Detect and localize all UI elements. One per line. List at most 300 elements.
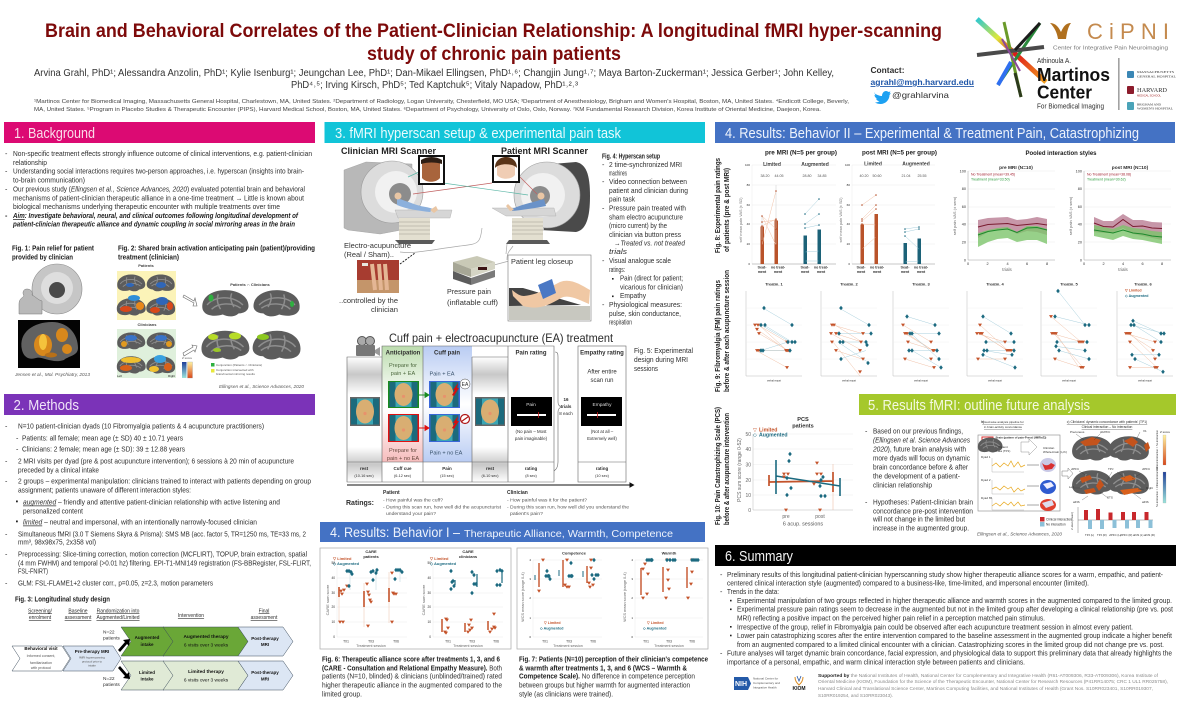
text: methods bullets: -	[5, 550, 8, 558]
figure b: brain analysis pipeline	[978, 420, 1072, 526]
video portrait: patient	[492, 155, 520, 183]
chart: pooled pre MRI: 100	[960, 170, 966, 174]
text: background bullets: Non-specific treatment effects strongly influence outcome of clinical interventions, e.g. patient-clinician	[13, 149, 312, 158]
figure c: dynamic concordance brains: pbrPFC	[1100, 430, 1111, 434]
chart: CARE patients: Treatment session	[356, 644, 386, 648]
panel: 5. Results fMRI	[859, 394, 1176, 538]
text: Fig. 4 description: ratings:	[609, 265, 625, 274]
chart: competence: ▽ Limited	[543, 621, 561, 625]
chart: pooled post MRI: 80	[1078, 187, 1082, 191]
authors: PhD⁴˒⁵; Irving Kirsch, PhD⁵; Ted Kaptchuk⁵; Vitaly Napadow, PhD¹˒²˒³	[291, 80, 579, 91]
label: electro-acupuncture: Electro-acupuncture	[344, 241, 411, 250]
illustration: patient scanner	[492, 162, 590, 244]
bottom labels: rating	[596, 466, 608, 471]
bottom labels: rest	[486, 466, 495, 471]
N labels: N=22	[103, 676, 115, 682]
chevron text: Post-therapy	[251, 636, 279, 641]
text: summary bullets: Trends in the data:	[727, 587, 779, 596]
text: methods bullets: FSL-FNIRT)	[18, 566, 48, 576]
chevron text: Augmented therapy	[183, 634, 229, 640]
logo: NIH	[734, 676, 780, 690]
text: Fig. 4 description: sham electro acupuncture	[609, 212, 683, 222]
arrow: clinicians to conjunction	[183, 345, 197, 356]
label: patient scanner: Patient MRI Scanner	[501, 146, 589, 156]
chart: competence: WCS mean score (range 0-4)	[521, 571, 525, 622]
phase labels: Intervention	[178, 613, 204, 619]
Fig. 3 caption: Fig. 3: Longitudinal study design	[15, 594, 110, 604]
figure c: dynamic concordance brains: vlPFC	[1142, 467, 1151, 471]
text: summary bullets: Irrespective of the group, relief in Fibromyalgia pain could be observed after each acupuncture treatment session in almost every patient.	[737, 622, 1133, 631]
logo: NIH: Integrative Health	[753, 686, 777, 690]
chart: pooled post MRI: 2	[1102, 262, 1105, 266]
figure c: dynamic concordance brains: Clinical interaction – No interaction	[1082, 425, 1133, 429]
chart: pooled pre MRI: 6	[1026, 262, 1028, 266]
text: methods bullets: personalized content	[23, 506, 83, 516]
caption: Fig. 6: (CARE - Consultation and Relational Empathy Measure). Both	[322, 664, 502, 672]
chart: post MRI pain ratings: ment	[917, 270, 926, 274]
chart: CARE clinicians: clinicians	[459, 554, 478, 559]
rating screens: Extremely well)	[587, 436, 617, 441]
affiliations: ¹Martinos Center for Biomedical Imaging, Massachusetts General Hospital, Charlestown, MA, United States. ²Department of Radiology, Logan University, Chesterfield, MO USA; ³Department of Anesthesiology, Brigham and Women's Hospital, Boston, MA, United States. ⁴Endicott College, Beverly,	[34, 98, 849, 105]
text: Fig. 4 description: clinician via button press	[609, 230, 681, 239]
label: clinician scanner: Clinician MRI Scanner	[341, 146, 437, 156]
chart: competence: TX3	[566, 640, 572, 644]
chart: warmth: 2	[631, 596, 633, 600]
chevron text: with protocol	[31, 666, 51, 670]
chart: warmth: TX6	[689, 640, 695, 644]
chart: CARE patients: patients	[363, 554, 379, 559]
chart: PCS patients: PCS	[797, 417, 809, 423]
authors: Arvina Grahl, PhD¹; Alessandra Anzolin, PhD¹; Kylie Isenburg¹; Jeungchan Lee, PhD¹; Dan-Mikael Ellingsen, PhD¹˒⁶; Changjin Jung¹˒⁷; Maya Barton-Zuckerman¹; Jessica Gerber¹; John Kelley,	[34, 68, 834, 79]
Fig. 2 citation: Ellingsen et al., Science Advances, 2020	[219, 384, 304, 390]
chart: post MRI pain ratings: post MRI (N=5 per group)	[862, 150, 937, 156]
caption: Fig. 9 vertical	[715, 270, 731, 392]
phase labels: assessment	[251, 615, 278, 621]
text: background bullets: to-brain communication)	[13, 176, 85, 185]
logo: Martinos Center: Athinoula A.	[1037, 58, 1071, 65]
Fig. 3: study design diagram	[12, 608, 293, 690]
authors	[34, 68, 834, 91]
chevron text: familiarization	[30, 661, 52, 665]
logos: affiliated hospitals: WOMEN'S HOSPITAL	[1137, 106, 1173, 110]
text: methods bullets	[5, 422, 311, 588]
rating screens	[511, 397, 622, 441]
Fig. 2: conjunction brains: Conjunction intersected with	[216, 368, 254, 372]
heading: fMRI	[859, 394, 1176, 415]
chart: CARE patients: 40	[331, 576, 335, 580]
text: methods bullets: Preprocessing: Slice-timing correction, motion correction (MCFLIRT), TOPUP, brain extraction, spatial	[18, 550, 307, 558]
chart: CARE clinicians: 50	[427, 561, 431, 565]
chart: PCS patients: 20	[745, 478, 751, 484]
label: pressure pain	[447, 287, 498, 307]
text: Fig. 4 description: Fig. 4: Hyperscan setup	[602, 152, 660, 160]
chart: pre MRI pain ratings: 28.80	[802, 174, 812, 178]
chart: pooled post MRI: self pain VAS (± sem)	[1068, 196, 1073, 235]
caption: Fig. 6: higher therapeutic alliance in the augmented compared to the	[322, 680, 502, 690]
chart: PCS patients: 10	[745, 493, 751, 499]
chart: CARE patients: 50	[331, 561, 335, 565]
column titles	[386, 350, 624, 356]
chart: FM pain Treatm. 6	[1117, 282, 1173, 382]
contact block: Contact:	[870, 65, 905, 75]
chart: post MRI pain ratings: 40	[847, 222, 850, 226]
colour bars: Z score	[1160, 430, 1170, 434]
chart: pooled post MRI: 0	[1083, 262, 1085, 266]
contact block: agrahl@mgh.harvard.edu	[870, 77, 974, 87]
chart: CARE patients: ▽ Limited	[332, 556, 352, 561]
chart: FM pain Treatm. 6: verbal report	[1138, 380, 1152, 382]
text: funding acknowledgement: Supported by the National Institutes of Health, National Center for Complementary and Integrative Health (R61-AT009306, R33-AT009306), Korea Institute of	[818, 673, 1159, 678]
logo: CiPNI starburst	[977, 19, 1046, 97]
chevron text: 6 visits over 3 weeks	[184, 678, 229, 684]
Fig. 2: clinicians brains: Left	[117, 374, 122, 378]
chart: CARE patients	[325, 549, 407, 648]
logo: Martinos Center: For Biomedical Imaging	[1037, 104, 1104, 110]
chart: PCS patients: Augmented	[759, 432, 788, 438]
bar chart: z scores per region	[1070, 507, 1155, 537]
chart: PCS patients	[737, 417, 853, 528]
chart: competence: Competence	[562, 550, 587, 556]
caption: Fig. 6: patients (N=10, blinded) & clinicians (unblinded/trained) rated	[322, 672, 502, 680]
figure c: dynamic concordance brains: aINS	[1073, 500, 1080, 504]
chart: competence: 2	[529, 596, 531, 600]
bottom labels: Cuff cue	[394, 466, 412, 471]
chart: FM pain Treatm. 5: verbal report	[1062, 380, 1076, 382]
phase labels: Baseline	[68, 608, 88, 614]
N labels	[103, 630, 120, 688]
chart: pooled post MRI: 20	[1078, 240, 1082, 244]
figure c: dynamic concordance brains: c) Clinicians' dynamic concordance with patients' (TP1)	[1067, 420, 1147, 424]
figure b: brain analysis pipeline: Patient	[998, 445, 1008, 449]
text: summary bullets: Lower pain catastrophizing scores after the entire intervention compared to the baseline assessment in the augmented group indicate a higher benefit	[737, 631, 1172, 640]
chart: warmth: ◇ Augmented	[642, 626, 666, 630]
chart: CARE clinicians: TX1	[445, 640, 451, 644]
heading: behavior I	[320, 522, 705, 542]
logo: CiPNI wordmark: CiPNI	[1087, 19, 1169, 44]
text: methods bullets: limited – neutral and impersonal, with an intentionally narrowly-focused clinician	[23, 518, 257, 526]
chart: competence	[521, 550, 602, 648]
text: Fig. 4 description	[602, 152, 688, 326]
text: background bullets: -	[5, 184, 8, 193]
text: background bullets: relationship	[13, 158, 47, 167]
chart: pooled pre MRI: 60	[962, 205, 966, 209]
text: summary bullets: Experimental manipulation of two groups reflected in higher therapeutic alliance and warmth scores in the augmented compared to the limited group.	[737, 596, 1172, 605]
phase labels: enrolment	[29, 615, 52, 621]
text: Fig. 4 description: 2 time-synchronized MRI	[609, 160, 682, 169]
text: funding acknowledgement: Oriental Medicine (KIOM), Foundation for the Science of the Therapeutic Encounter, National Center for Research Resources (P41RR14075; CRC 1 UL1 RR025758),	[818, 679, 1168, 684]
panel: 6. Summary	[715, 545, 1176, 698]
chart: pooled pre MRI: 20	[962, 240, 966, 244]
chart: warmth: Warmth	[662, 550, 677, 556]
bar chart: z scores per region: TPJ (R)	[1097, 533, 1107, 537]
label: pressure pain: (inflatable cuff)	[447, 298, 498, 307]
heading: behavior II: 4. Results: Behavior II – Experimental & Treatment Pain, Catastrophizing	[725, 126, 1139, 142]
Ratings block	[346, 490, 630, 516]
caption: Fig. 7: between groups but higher warmth for augmented interaction	[519, 680, 690, 690]
title: Brain and Behavioral Correlates of the Patient-Clinician Relationship: A longitudinal fMRI hyper-scanning	[45, 20, 942, 42]
heading: methods: 2. Methods	[14, 398, 79, 414]
illustration: patient leg closeup: Patient leg closeup	[511, 257, 573, 266]
N labels: patients	[103, 636, 120, 642]
bottom labels: rest	[360, 466, 369, 471]
icon: twitter bird	[874, 91, 891, 104]
logos: affiliated hospitals: MEDICAL SCHOOL	[1137, 94, 1161, 98]
Ratings block: - During this scan run, how well did you understand the	[507, 504, 630, 510]
chart: CARE patients: ◇ Augmented	[332, 561, 360, 566]
N labels: patients	[103, 682, 120, 688]
chart: pooled pre MRI: No Treatment (mean=39.45)	[971, 172, 1015, 176]
text: methods bullets: GLM: FSL-FLAME1+2 cluster corr., p=0.05, z=2.3, motion parameters	[18, 578, 213, 588]
chart: CARE clinicians: Treatment session	[453, 644, 483, 648]
text: fMRI bullets: brain concordance before & after	[873, 462, 969, 472]
cue text: After entire	[587, 370, 617, 376]
figure b: brain analysis pipeline: Whole-brain (t,ch)	[1043, 450, 1067, 454]
chart: competence: 4	[529, 558, 531, 562]
text: fMRI bullets: Hypotheses: Patient-clinician brain	[873, 498, 973, 506]
text: summary bullets: MRI) reflecting a positive impact on the perceived higher pain relief in a perception matched pain stimulus.	[737, 614, 1045, 623]
text: methods bullets: Simultaneous fMRI (3.0 T Siemens Skyra & Prisma): SMS MB (acc. factor 5, TR=1250 ms, TE=33 ms, 2	[18, 530, 306, 538]
chevrons	[12, 627, 293, 690]
figure b: brain analysis pipeline: Data (TP1)	[996, 449, 1010, 453]
chart: competence: ◇ Augmented	[539, 626, 563, 630]
caption: Fig. 7: Fig. 7: Patients (N=10) perception of their clinician's competence	[519, 654, 708, 664]
chart: post MRI pain ratings: 40.20	[860, 174, 868, 178]
heading: methods	[4, 394, 315, 415]
text: background bullets: -	[5, 211, 8, 220]
logos: affiliated hospitals	[1127, 70, 1176, 110]
text: background bullets: mechanisms of patient-clinician therapeutic alliance in a one-time treatment → Little is known about	[13, 193, 304, 202]
chart: pooled pre MRI: 40	[962, 222, 966, 226]
text: Fig. 4 description: Visual analogue scale	[609, 256, 671, 265]
contact block	[870, 65, 974, 104]
text: summary bullets: Preliminary results of this longitudinal patient-clinician hyperscanning study show higher therapeutic alliance scores for a warm, empathic, and patient-	[727, 570, 1164, 579]
text: methods bullets: -	[5, 456, 8, 466]
chart: pooled post MRI: trials	[1118, 267, 1128, 272]
caption: Fig. 6	[322, 654, 502, 698]
chart: PCS patients: Limited	[759, 428, 777, 434]
Ratings block: - How painful was the cuff?	[383, 498, 444, 502]
chart: post MRI pain ratings: self mean pain VAS (± SD)	[839, 197, 843, 243]
chart: pre MRI pain ratings: 38.20	[760, 174, 770, 178]
text: fMRI bullets: 2020), future brain analysis with	[872, 444, 966, 454]
caption: Fig. 8 vertical	[715, 158, 731, 253]
text: Fig. 4 description: trials	[609, 247, 627, 256]
Fig. 2: conjunction brains: Conjunction (Patients ∩ Clinicians)	[216, 363, 262, 367]
text: methods bullets: Clinicians: 2 female; mean age (± SD): 39 ± 12.88 years	[22, 444, 185, 454]
chart: warmth: 3	[631, 577, 633, 581]
Fig. 2: colour scale	[182, 356, 192, 378]
Ratings block: Ratings:	[346, 500, 374, 507]
chevron text: intake	[88, 664, 96, 668]
chart: warmth: Treatment session	[654, 644, 684, 648]
chart: PCS patients: 50	[745, 432, 751, 438]
rating screens: (Not at all –	[591, 429, 614, 434]
chevron text: Limited	[139, 670, 155, 675]
text: fMRI bullets: -	[865, 426, 868, 436]
text: methods bullets: Patients: all female; mean age (± SD) 40 ± 10.71 years	[22, 434, 183, 442]
chart: PCS patients: patients	[792, 424, 814, 430]
chevron text: Post-therapy	[251, 670, 279, 675]
colour bars: Clinical interaction > No interaction	[1155, 429, 1159, 470]
text: Fig. 4 description: →Treated vs. not treated	[614, 238, 686, 248]
Fig. 1 caption	[12, 244, 95, 262]
chart: CARE clinicians: CARE	[462, 549, 474, 554]
illustration: clinician scanner	[344, 161, 452, 244]
text: background bullets: Our previous study (Ellingsen et al., Science Advances, 2020) evaluated potential brain and behavioral	[13, 184, 305, 193]
chevron text: Behavioral visit	[24, 646, 58, 651]
chart: competence: 3	[529, 577, 531, 581]
Figure citation: Ellingsen et al., Science Advances, 2020	[977, 532, 1062, 538]
text: funding acknowledgement	[818, 673, 1168, 698]
chart: pooled pre MRI: 4	[1006, 262, 1009, 266]
chart: CARE clinicians: CARE sum score	[421, 584, 426, 615]
chart: pre MRI pain ratings: Augmented	[801, 162, 829, 168]
Ratings block: - How painful was it for the patient?	[507, 498, 588, 502]
chart: pooled pre MRI: Treatment (mean=33.50)	[971, 178, 1010, 182]
chart: CARE patients: CARE	[365, 549, 377, 554]
logo: CiPNI wordmark: Center for Integrative Pain Neuroimaging	[1053, 46, 1168, 52]
logo: Martinos Center: Martinos	[1037, 65, 1110, 85]
logo: Martinos Center	[1037, 58, 1119, 110]
bar chart: z scores per region: aINS (L)	[1133, 533, 1143, 537]
arrows	[419, 392, 429, 398]
brace and trial count	[554, 352, 573, 471]
cue text: Pain + EA	[429, 372, 455, 378]
chart: PCS patients: 6 acup. sessions	[783, 522, 823, 528]
Fig. 2: clinicians brains: Right	[168, 374, 175, 378]
bar chart: z scores per region: aINS (R)	[1144, 533, 1155, 537]
Ratings block: Patient	[383, 490, 400, 496]
chart: pre MRI pain ratings: Limited	[763, 162, 781, 168]
heading: fMRI: 5. Results fMRI: outline future analysis	[868, 398, 1090, 414]
chevron text: intake	[140, 642, 154, 647]
EA markers: EA	[462, 382, 469, 388]
bottom labels: (10 sec)	[595, 474, 610, 478]
chart: post MRI pain ratings: ment	[901, 270, 910, 274]
Ratings block: - During this scan run, how well did the acupuncturist	[383, 504, 502, 510]
text: Fig. 4 description: Pressure pain treated with	[609, 204, 686, 212]
logos: affiliated hospitals: BRIGHAM AND	[1137, 102, 1162, 106]
text: Fig. 4 description: Empathy	[620, 291, 646, 300]
brace and trial count: trials	[561, 404, 572, 409]
cue text: pain + EA	[391, 371, 415, 377]
caption: Fig. 9 vertical: before & after each acupuncture session	[724, 270, 731, 392]
chevron text: Informed consent,	[27, 654, 55, 658]
chart: CARE clinicians: TX3	[469, 640, 475, 644]
contact block: @grahlarvina	[892, 90, 949, 100]
text: Fig. 4 description: Physiological measures:	[609, 300, 682, 309]
chart: PCS patients: post	[815, 514, 825, 520]
chart: pooled pre MRI: 8	[1046, 262, 1048, 266]
Ratings block: Clinician	[507, 490, 528, 496]
figure c: dynamic concordance brains: vlPFC	[1071, 467, 1080, 471]
chevron text: MRI	[261, 676, 269, 682]
colour bars: No interaction > Clinical interaction	[1155, 466, 1159, 507]
EA markers	[460, 379, 470, 424]
figure c: dynamic concordance brains: STS	[1107, 496, 1113, 500]
chart: post MRI pain ratings: 0	[848, 262, 850, 266]
backgrounds	[347, 357, 382, 482]
text: background bullets: Aim: Investigate behavioral, neural, and clinical outcomes following longitudinal development of	[12, 211, 299, 220]
text: Fig. 4 description: machines	[609, 168, 627, 178]
text: methods bullets: -	[5, 476, 8, 486]
chart: FM pain Treatm. 4	[967, 282, 1023, 382]
figure b: brain analysis pipeline: Dyad 2	[981, 478, 991, 482]
caption: Fig. 8 vertical: Fig. 8: Experimental pain ratings	[715, 158, 722, 253]
column titles: Cuff pain	[434, 350, 460, 356]
chevron text: 6 visits over 3 weeks	[184, 642, 229, 648]
text: methods bullets: mm³, 98x98x75, 2x358 vol)	[18, 538, 96, 546]
chart: PCS patients: ◇	[753, 432, 757, 438]
Ratings block: understand your pain?	[386, 511, 437, 516]
text: summary bullets: -	[720, 587, 723, 596]
rating screens: pain imaginable)	[515, 436, 548, 441]
chart: pre MRI pain ratings: ment	[817, 270, 826, 274]
chart: PCS patients: 0	[748, 508, 751, 514]
chart: pre MRI pain ratings: 0	[748, 262, 750, 266]
text: methods bullets: 2 MRI visits per dyad (pre & post acupuncture intervention); 6 sessions à 20 min of acupuncture	[18, 456, 294, 466]
Fig. 2: clinicians brains	[117, 322, 176, 378]
title: study of chronic pain patients	[367, 43, 621, 65]
text: background bullets: Understanding social interactions requires two-person approaches, i.e. hyperscan (insights into brain-	[13, 167, 305, 176]
figure b: brain analysis pipeline: Dyad 65	[981, 496, 993, 500]
chevron text: Pre-therapy MRI	[75, 649, 109, 654]
text: methods bullets: preceded by a clinical intake	[18, 466, 99, 474]
chart: pooled post MRI: 8	[1161, 262, 1163, 266]
text: summary bullets: centered clinical interaction style (augmented) compared to a business-like, time-limited, and impersonal encounter (limited).	[727, 578, 1089, 588]
Fig. 2: clinicians brains: Clinicians	[138, 322, 157, 327]
Ratings block: patient's pain?	[510, 511, 544, 516]
chart: FM pain Treatm. 3: Treatm. 3	[912, 282, 931, 286]
Fig. 2: colour scale: Z score	[182, 356, 192, 360]
text: fMRI bullets: concordance pre-post intervention	[873, 506, 973, 516]
text: methods bullets: augmented – friendly and attentive patient-clinician relationship with active listening and	[23, 498, 280, 506]
text: methods bullets: 2 groups – experimental manipulation: clinicians trained to interact with patients depending on group	[18, 476, 311, 486]
cue text	[387, 363, 617, 462]
bar chart: z scores per region: vlPFC (L)	[1109, 533, 1121, 537]
cue text: Prepare for	[389, 448, 417, 454]
time arrow	[347, 483, 634, 487]
Fig. 2 caption: Fig. 2: Shared brain activation anticipating pain (patient)/providing	[118, 244, 315, 252]
Fig. 2: patients brains	[117, 263, 176, 320]
heading: background: 1. Background	[14, 126, 95, 142]
Fig. 5 heading: Cuff pain + electroacupuncture (EA) treatment	[389, 331, 614, 345]
column titles: Pain rating	[515, 350, 547, 356]
logo: Martinos Center: Center	[1037, 82, 1092, 102]
chart: FM pain Treatm. 2: Treatm. 2	[840, 282, 859, 286]
chart: CARE patients: 10	[331, 620, 335, 624]
chart: pooled post MRI: 4	[1122, 262, 1124, 266]
chart: post MRI pain ratings: ment	[873, 270, 882, 274]
Fig. 2 caption	[118, 244, 315, 262]
chart: post MRI pain ratings: treat-	[857, 266, 866, 270]
chart: PCS patients: PCS sum score (range 0-52)	[737, 438, 743, 502]
chart: pre MRI pain ratings: no treat-	[814, 266, 829, 270]
chevron text: protocol prior to	[82, 660, 102, 664]
panel: 4. Results Behavior I	[320, 522, 708, 698]
chart: pre MRI pain ratings: treat-	[758, 266, 767, 270]
text: methods bullets: -	[5, 422, 8, 430]
cue text: Prepare for	[389, 363, 417, 369]
chart: pooled post MRI: 40	[1078, 222, 1082, 226]
chart: post MRI pain ratings: treat-	[901, 266, 910, 270]
cue text: pain + no EA	[387, 456, 419, 462]
arrow: dashed connection to control	[400, 253, 415, 264]
chart: pooled pre MRI: self pain VAS (± sem)	[952, 196, 957, 235]
chart: CARE patients: 30	[331, 591, 335, 595]
text: Fig. 4 description: Pain (direct for patient;	[620, 274, 683, 282]
chart: CARE patients: 20	[331, 605, 335, 609]
